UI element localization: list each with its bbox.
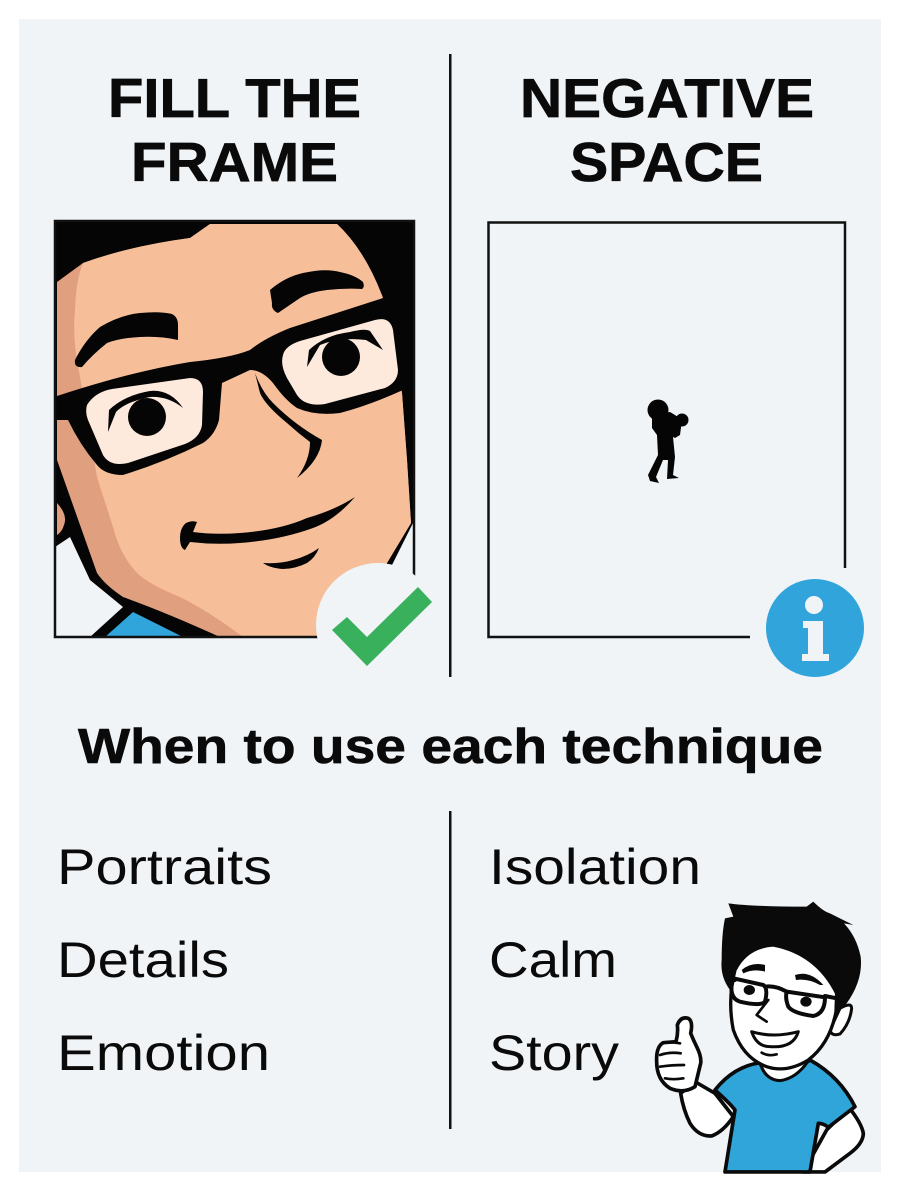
badge: info — [766, 579, 864, 677]
list: negative space uses: Isolation — [489, 839, 701, 895]
list: fill the frame uses: Portraits — [57, 839, 272, 895]
right arm — [803, 1107, 863, 1172]
facial features — [742, 964, 823, 1007]
heading: fill the frame: FILL THE — [108, 67, 361, 129]
t-shirt — [715, 1060, 855, 1172]
hair — [721, 902, 861, 1013]
eyes — [108, 330, 383, 436]
heading: fill the frame: FRAME — [131, 131, 338, 193]
heading: negative space — [520, 67, 814, 193]
icon: tiny figure silhouette — [648, 400, 688, 483]
ear — [830, 1005, 852, 1035]
mascot: thumbs up character — [657, 902, 863, 1172]
eyebrows — [75, 312, 178, 367]
panel: fill the frame close-up face — [55, 221, 414, 637]
list: negative space uses: Calm — [489, 932, 617, 988]
list: negative space uses: Story — [489, 1025, 619, 1081]
heading: negative space: NEGATIVE — [520, 67, 814, 129]
badge: check mark — [316, 563, 440, 687]
list: fill the frame uses: Emotion — [57, 1025, 270, 1081]
list: fill the frame uses: Details — [57, 932, 229, 988]
left arm and thumb-up hand — [657, 1018, 733, 1136]
heading: fill the frame — [108, 67, 361, 193]
glasses — [57, 297, 403, 475]
nose — [255, 373, 322, 478]
panel: negative space frame — [488, 222, 845, 637]
face — [731, 945, 837, 1069]
smile — [180, 497, 355, 550]
list: negative space uses — [489, 839, 701, 1081]
subheading: When to use each technique — [78, 720, 823, 774]
glasses — [730, 978, 837, 1016]
neck — [760, 1053, 808, 1081]
list: fill the frame uses — [57, 839, 272, 1081]
heading: negative space: SPACE — [570, 131, 763, 193]
nose and mouth — [752, 1000, 798, 1055]
